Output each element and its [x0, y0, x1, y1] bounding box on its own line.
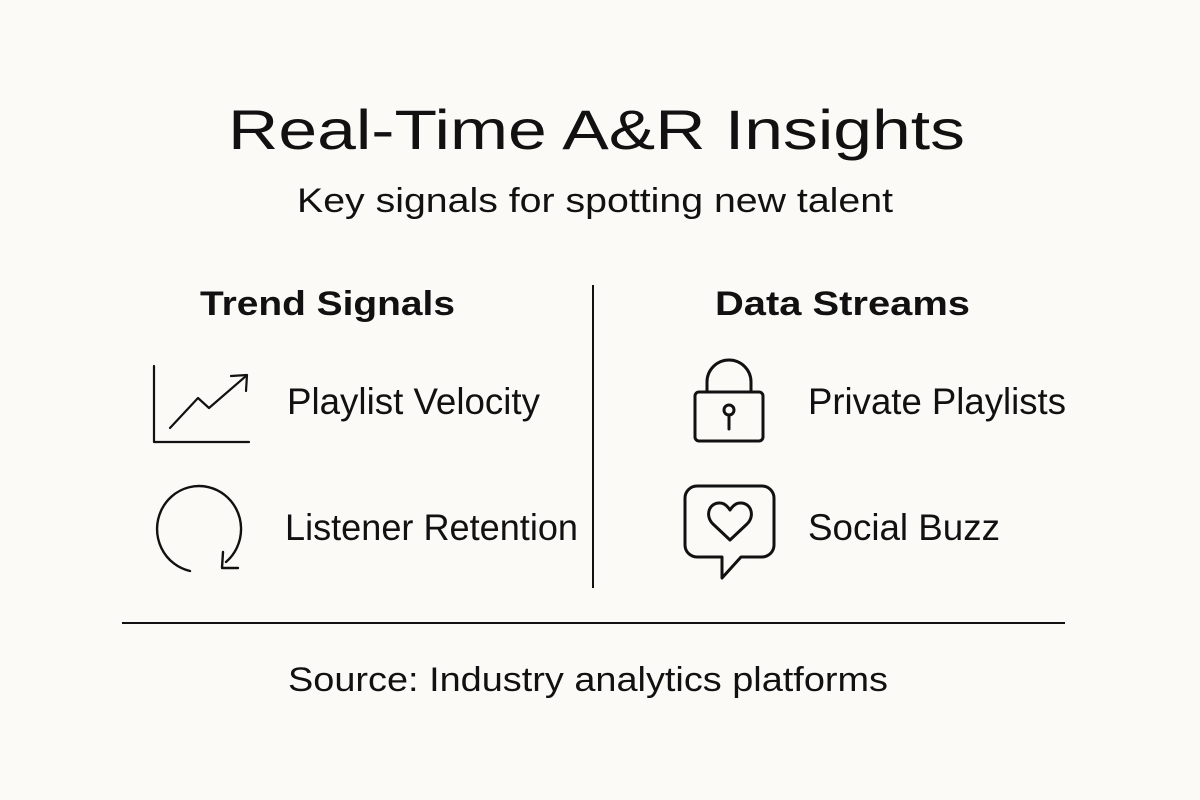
icon: trend chart	[154, 366, 249, 442]
icon: speech bubble heart	[685, 486, 774, 578]
label: Social Buzz: Social Buzz	[808, 507, 1000, 548]
heading: Data Streams: Data Streams	[715, 285, 970, 323]
source note: Source: Industry analytics platforms	[288, 661, 888, 699]
label: Playlist Velocity: Playlist Velocity	[287, 381, 540, 422]
icon: lock	[695, 360, 763, 441]
label: Listener Retention: Listener Retention	[285, 507, 578, 548]
label: Private Playlists: Private Playlists	[808, 381, 1066, 422]
subtitle: Key signals for spotting new talent	[297, 182, 894, 220]
heading: Trend Signals: Trend Signals	[200, 285, 455, 323]
icon: retention loop	[157, 486, 241, 571]
title: Real-Time A&R Insights	[228, 98, 965, 161]
